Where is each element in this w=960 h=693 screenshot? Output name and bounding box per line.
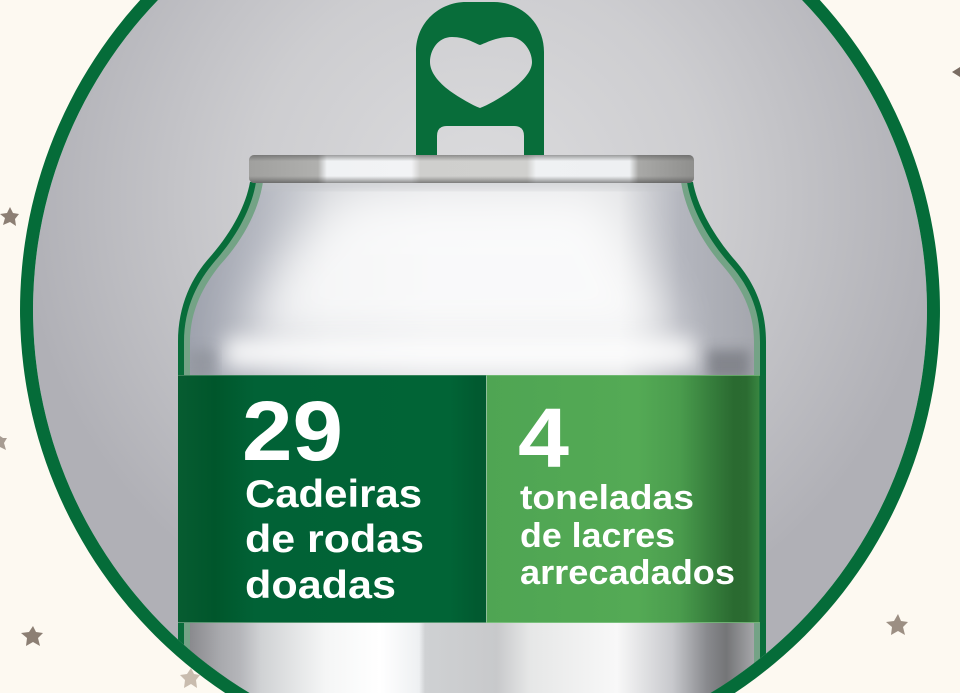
label: toneladas de lacres arrecadados: toneladas [520, 479, 694, 517]
number 4: 4 [518, 391, 569, 485]
star: bottom left near ring [180, 668, 200, 688]
star: left upper [0, 207, 19, 226]
panel: tonnes of tabs collected [486, 375, 766, 623]
number 29: 29 [242, 384, 343, 478]
label: Cadeiras de rodas doadas [245, 473, 424, 607]
can body metal [184, 178, 760, 380]
label: toneladas de lacres arrecadados [520, 479, 735, 592]
star: bottom left [21, 626, 43, 646]
star: right top edge [952, 67, 960, 77]
panel: wheelchairs donated [178, 375, 486, 623]
label: Cadeiras de rodas doadas: doadas [245, 564, 396, 607]
star: bottom right [886, 614, 908, 635]
can rim [249, 155, 694, 183]
label: Cadeiras de rodas doadas: Cadeiras [245, 473, 422, 516]
star: left middle [0, 436, 7, 450]
can lower body [190, 622, 754, 693]
can inner edge [184, 182, 760, 693]
can outline [178, 182, 766, 693]
can pull tab with heart [416, 2, 544, 156]
label: toneladas de lacres arrecadados: arrecadados [520, 554, 735, 592]
label: Cadeiras de rodas doadas: de rodas [245, 518, 424, 561]
label: toneladas de lacres arrecadados: de lacres [520, 517, 675, 555]
can [178, 2, 766, 693]
